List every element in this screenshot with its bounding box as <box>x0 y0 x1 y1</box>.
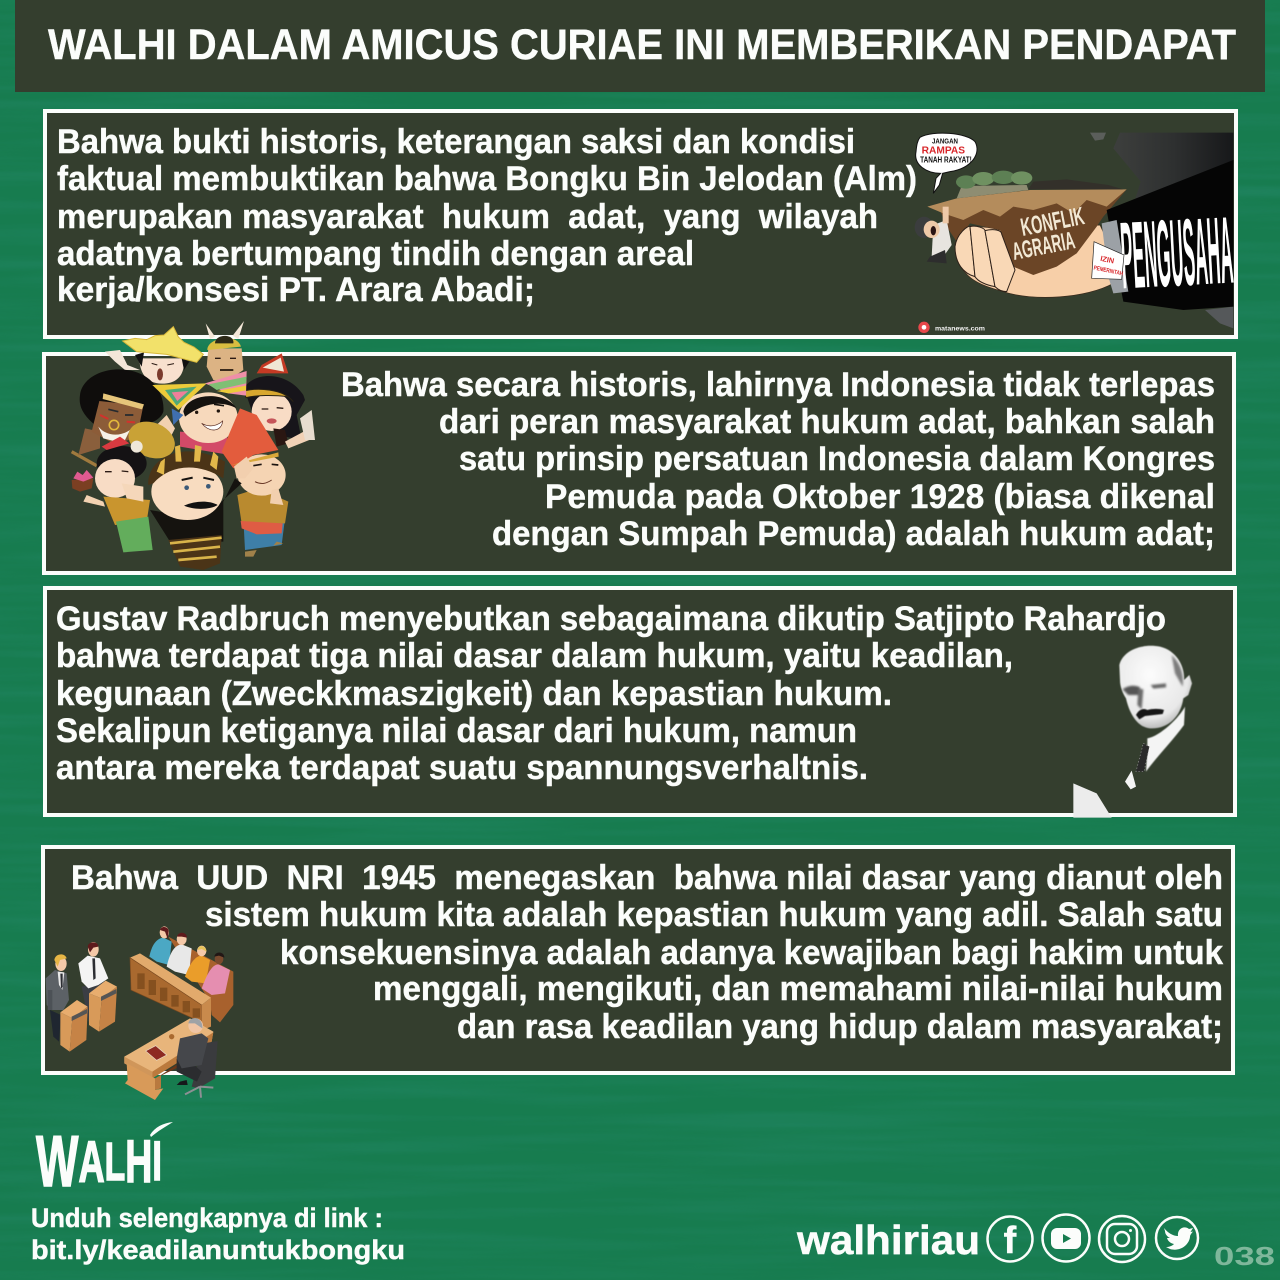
moustache <box>1136 709 1164 719</box>
illustration: ruang sidang <box>46 926 233 1100</box>
konflik agraria lettering: KONFLIK <box>1018 202 1087 242</box>
icon: instagram <box>1099 1216 1145 1262</box>
panel 2: sejarah indonesia <box>44 321 1234 573</box>
icon: twitter <box>1156 1217 1198 1259</box>
download link text <box>31 1203 405 1265</box>
judge in chair <box>177 1018 218 1098</box>
icon: facebook <box>988 1216 1032 1262</box>
judge desk <box>124 1018 213 1100</box>
walhi logo: L <box>105 1132 125 1192</box>
panel 4 text: Bahwa UUD NRI 1945 menegaskan bahwa nilai dasar yang dianut oleh <box>71 859 1223 897</box>
lawyer in suit <box>46 954 69 1042</box>
panel 4 text: sistem hukum kita adalah kepastian hukum yang adil. Salah satu <box>205 896 1223 934</box>
konflik agraria lettering: AGRARIA <box>1010 227 1077 266</box>
speech bubble: JANGAN <box>932 136 958 145</box>
icon: facebook: f <box>1004 1220 1017 1262</box>
woman with lotus bowl <box>72 437 153 552</box>
walhi logo: H <box>125 1128 152 1195</box>
walhi logo: W <box>36 1122 78 1202</box>
panel 2 text: satu prinsip persatuan Indonesia dalam Kongres <box>459 440 1215 478</box>
icon: youtube <box>1042 1214 1090 1262</box>
panel 1 text: Bahwa bukti historis, keterangan saksi dan kondisi <box>57 123 855 161</box>
konflik agraria lettering <box>1010 202 1087 266</box>
portrait: gustav radbruch <box>1073 646 1192 818</box>
panel 3: gustav radbruch <box>45 588 1235 818</box>
cartoon: konflik agraria <box>915 133 1235 333</box>
cliff <box>927 171 1127 275</box>
panel 2 text: Pemuda pada Oktober 1928 (biasa dikenal <box>545 478 1215 516</box>
matanews logo: matanews.com <box>935 326 985 333</box>
panel 3 text: bahwa terdapat tiga nilai dasar dalam hukum, yaitu keadilan, <box>56 637 1013 675</box>
lectern back <box>89 981 117 1032</box>
paper <box>1073 783 1112 818</box>
feather hat man <box>206 321 244 382</box>
walhi logo: A <box>78 1130 105 1195</box>
panel 1 text <box>57 123 917 309</box>
tie <box>1136 743 1149 772</box>
pocket square <box>1125 771 1136 789</box>
panel 1: bukti historis <box>45 111 1236 337</box>
jury members <box>149 926 230 995</box>
panel 3 text <box>56 600 1166 787</box>
hanging man <box>915 207 952 263</box>
gavel block and book <box>146 1034 174 1060</box>
social handle: walhiriau <box>796 1217 980 1263</box>
matanews logo <box>918 322 985 333</box>
panel 3 text: Gustav Radbruch menyebutkan sebagaimana dikutip Satjipto Rahardjo <box>56 600 1166 638</box>
front man with batik hat <box>148 445 253 570</box>
facial features <box>1123 655 1183 709</box>
izin pemerintah paper <box>1092 242 1124 279</box>
page number: 038 <box>1214 1241 1275 1271</box>
crown man <box>105 327 203 384</box>
shirt collar <box>1146 707 1185 772</box>
walhi logo: I <box>152 1129 162 1192</box>
hand palm <box>955 225 1113 297</box>
head <box>1119 646 1192 728</box>
panel 4: uud nri 1945 <box>43 847 1233 1100</box>
panel 2 text: Bahwa secara historis, lahirnya Indonesia tidak terlepas <box>341 366 1215 404</box>
izin pemerintah paper: IZIN <box>1100 254 1115 265</box>
panel 3 text: Sekalipun ketiganya nilai dasar dari hukum, namun <box>56 712 857 750</box>
panel 1 text: merupakan masyarakat hukum adat, yang wilayah <box>57 198 878 236</box>
woman with crown <box>244 353 315 448</box>
panel 4 text: konsekuensinya adalah adanya kewajiban bagi hakim untuk <box>280 934 1224 972</box>
title bar <box>15 0 1265 92</box>
jury bench <box>168 937 233 1022</box>
man with red hat <box>222 408 288 557</box>
afro man <box>72 369 163 466</box>
panel 3 text: antara mereka terdapat suatu spannungsverhaltnis. <box>56 749 868 787</box>
lectern front <box>60 1000 88 1052</box>
speech bubble: TANAH RAKYAT! <box>920 156 972 165</box>
speech bubble <box>916 133 977 193</box>
panel 4 text: menggali, mengikuti, dan memahami nilai-nilai hukum <box>373 970 1223 1008</box>
lawyer in white shirt <box>78 942 108 1022</box>
panel 4 text: dan rasa keadilan yang hidup dalam masyarakat; <box>457 1008 1223 1046</box>
illustration: tokoh adat nusantara <box>72 321 315 570</box>
fingers <box>955 226 1015 292</box>
panel 2 text: dengan Sumpah Pemuda) adalah hukum adat; <box>492 515 1215 553</box>
straw headdress <box>123 415 180 465</box>
panel 3 text: kegunaan (Zweckkmaszigkeit) dan kepastian hukum. <box>56 675 892 713</box>
jury box <box>130 953 211 1030</box>
panel 1 text: kerja/konsesi PT. Arara Abadi; <box>57 271 535 309</box>
izin pemerintah paper: PEMERINTAH <box>1093 265 1124 278</box>
smoke cloud <box>1090 133 1233 328</box>
logo accent <box>150 1122 173 1137</box>
download link text: bit.ly/keadilanuntukbongku <box>31 1235 405 1265</box>
panel 2 text: dari peran masyarakat hukum adat, bahkan salah <box>439 403 1215 441</box>
panel 1 text: faktual membuktikan bahwa Bongku Bin Jelodan (Alm) <box>57 160 917 198</box>
panel 2 text <box>341 366 1215 553</box>
sleeve <box>1107 160 1233 310</box>
speech bubble: RAMPAS <box>922 145 965 156</box>
smiling man with colourful hat <box>152 371 247 455</box>
panel 4 text <box>71 859 1224 1046</box>
panel 1 text: adatnya bertumpang tindih dengan areal <box>57 235 694 273</box>
download link text: Unduh selengkapnya di link : <box>31 1203 383 1233</box>
